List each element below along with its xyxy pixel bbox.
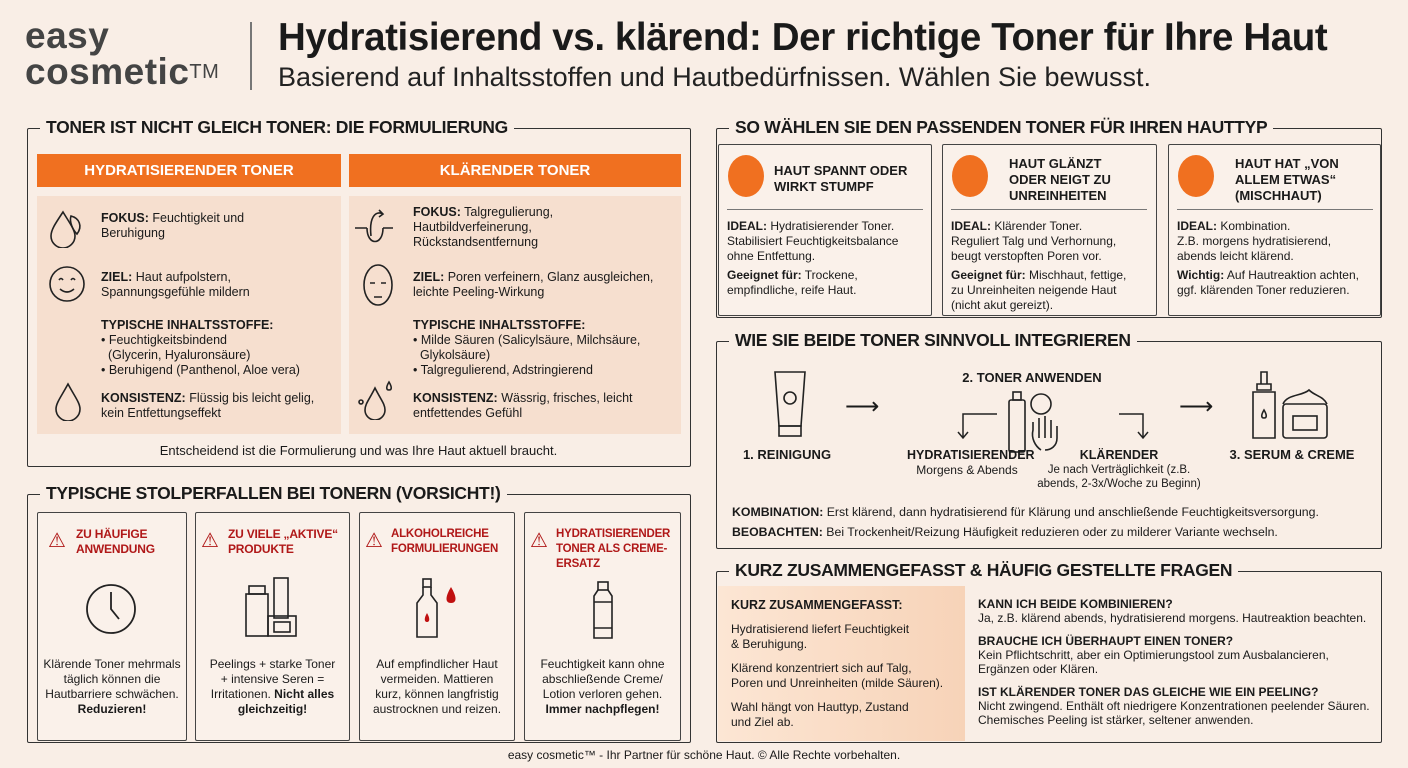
arrow: ⟶ xyxy=(845,393,879,420)
column klärend: leichte Peeling-Wirkung xyxy=(413,285,544,299)
icon: bottle xyxy=(593,581,613,639)
card: spannt: HAUT SPANNT ODER xyxy=(774,163,907,178)
faq column: Ja, z.B. klärend abends, hydratisierend morgens. Hautreaktion beachten. BRAUCHE ICH ÜBERHAUPT EINEN TONER? xyxy=(978,611,1366,648)
icon: drops xyxy=(358,380,392,420)
step 1: 1. REINIGUNG xyxy=(743,447,831,462)
card: creme-ersatz xyxy=(524,512,681,741)
card: creme-ersatz: TONER ALS CREME- xyxy=(556,543,667,555)
card: glänzt: (nicht akut gereizt). xyxy=(951,298,1053,312)
icon: orange face xyxy=(1178,155,1214,197)
column hydratisierend: KONSISTENZ: Flüssig bis leicht gelig, xyxy=(101,391,314,405)
summary column: Wahl hängt von Hauttyp, Zustand xyxy=(731,700,909,714)
card: glänzt: zu Unreinheiten neigende Haut xyxy=(951,283,1116,297)
card: glänzt: Reguliert Talg und Verhornung, xyxy=(951,234,1116,248)
card: zu viele aktive xyxy=(195,512,350,741)
card: zu viele aktive: gleichzeitig! xyxy=(238,702,307,716)
column klärend: Glykolsäure) xyxy=(420,348,490,362)
faq column: Kein Pflichtschritt, aber ein Optimierungstool zum Ausbalancieren, xyxy=(978,648,1329,662)
summary column: Poren und Unreinheiten (milde Säuren). xyxy=(731,676,943,690)
panel: faq xyxy=(716,571,1382,743)
step 2: 2. TONER ANWENDEN xyxy=(962,370,1102,385)
summary column: KURZ ZUSAMMENGEFASST: xyxy=(731,598,903,612)
icon: orange face xyxy=(728,155,764,197)
column hydratisierend: • Beruhigend (Panthenol, Aloe vera) xyxy=(101,363,300,377)
step 3 xyxy=(1230,371,1354,462)
card: glänzt: beugt verstopften Poren vor. xyxy=(951,249,1102,263)
column klärend: ZIEL: Poren verfeinern, Glanz ausgleichen, xyxy=(413,270,653,284)
card: mischhaut: (MISCHHAUT) xyxy=(1235,188,1322,203)
card: zu häufig xyxy=(37,512,187,741)
panel: formulierung xyxy=(27,128,691,467)
step 1 xyxy=(743,371,831,462)
card: creme-ersatz: abschließende Creme/ xyxy=(542,672,663,686)
card: spannt: WIRKT STUMPF xyxy=(774,179,874,194)
card: alkohol: Auf empfindlicher Haut xyxy=(376,657,498,671)
card: zu viele aktive: ZU VIELE „AKTIVE“ xyxy=(228,527,338,541)
faq column: Ergänzen oder Klären. IST KLÄRENDER TONER DAS GLEICHE WIE EIN PEELING? xyxy=(978,662,1318,699)
text: SO WÄHLEN SIE DEN PASSENDEN TONER FÜR IHREN HAUTTYP xyxy=(735,117,1267,137)
card: spannt xyxy=(718,144,932,316)
summary column: Klärend konzentriert sich auf Talg, xyxy=(731,661,912,675)
card: alkohol: ALKOHOLREICHE xyxy=(391,528,489,540)
card: alkohol: austrocknen und reizen. xyxy=(373,702,501,716)
card: zu häufig: Reduzieren! xyxy=(78,702,146,716)
card: alkohol: ⚠ xyxy=(365,530,383,552)
text: TYPISCHE STOLPERFALLEN BEI TONERN (VORSICHT!) xyxy=(46,483,500,503)
summary column xyxy=(718,586,965,741)
card: mischhaut: ggf. klärenden Toner reduzieren. xyxy=(1177,283,1350,297)
panel: stolperfallen xyxy=(27,494,691,743)
text: WIE SIE BEIDE TONER SINNVOLL INTEGRIEREN xyxy=(735,330,1131,350)
column klärend: KONSISTENZ: Wässrig, frisches, leicht xyxy=(413,391,632,405)
card: alkohol: FORMULIERUNGEN xyxy=(391,543,498,555)
card: spannt: Stabilisiert Feuchtigkeitsbalance xyxy=(727,234,898,248)
column klärend: • Talgregulierend, Adstringierend xyxy=(413,363,593,377)
card: glänzt: ODER NEIGT ZU xyxy=(1009,172,1111,187)
icon: clock xyxy=(86,584,136,634)
card: zu viele aktive: ⚠ xyxy=(201,530,219,552)
panel: hauttyp xyxy=(716,128,1382,318)
card: zu häufig: Hautbarriere schwächen. xyxy=(45,687,179,701)
card: zu viele aktive: PRODUKTE xyxy=(228,542,294,556)
faq column xyxy=(978,597,1370,727)
card: mischhaut: Wichtig: Auf Hautreaktion achten, xyxy=(1177,268,1359,282)
logo: cosmeticTM xyxy=(25,51,219,92)
summary column: und Ziel ab. xyxy=(731,715,794,729)
card: glänzt: IDEAL: Klärender Toner. xyxy=(951,219,1082,233)
footer note: Entscheidend ist die Formulierung und was Ihre Haut aktuell braucht. xyxy=(160,443,557,458)
card: glänzt: Geeignet für: Mischhaut, fettige, xyxy=(951,268,1126,282)
icon: face xyxy=(363,264,393,306)
text: KURZ ZUSAMMENGEFASST & HÄUFIG GESTELLTE FRAGEN xyxy=(735,560,1232,580)
card: mischhaut: IDEAL: Kombination. xyxy=(1177,219,1290,233)
card: spannt: IDEAL: Hydratisierender Toner. xyxy=(727,219,894,233)
card: mischhaut: abends leicht klärend. xyxy=(1177,249,1294,263)
notes: KOMBINATION: Erst klärend, dann hydratisierend für Klärung und anschließende Feuchtigkeitsversorgung. xyxy=(732,505,1319,519)
card: zu häufig: Klärende Toner mehrmals xyxy=(43,657,181,671)
step 2: Je nach Verträglichkeit (z.B. xyxy=(1048,464,1190,476)
header klärend: KLÄRENDER TONER xyxy=(440,162,590,179)
card: alkohol: kurz, können langfristig xyxy=(375,687,499,701)
faq column: Nicht zwingend. Enthält oft niedrigere Konzentrationen peelender Säuren. xyxy=(978,699,1370,713)
step 2 xyxy=(907,370,1201,490)
card: zu häufig: täglich können die xyxy=(64,672,160,686)
column klärend: FOKUS: Talgregulierung, xyxy=(413,205,553,219)
card: zu viele aktive: + intensive Seren = xyxy=(221,672,324,686)
card: mischhaut xyxy=(1168,144,1381,316)
card: glänzt: HAUT GLÄNZT xyxy=(1009,156,1101,171)
card: zu häufig: ZU HÄUFIGE xyxy=(76,527,147,541)
column klärend: entfettendes Gefühl xyxy=(413,406,522,420)
footer: easy cosmetic™ - Ihr Partner für schöne Haut. © Alle Rechte vorbehalten. xyxy=(508,748,900,762)
faq column: Chemisches Peeling ist stärker, seltener anwenden. xyxy=(978,713,1253,727)
card: creme-ersatz: Lotion verloren gehen. xyxy=(543,687,662,701)
card: mischhaut: HAUT HAT „VON xyxy=(1235,156,1339,171)
icon: drop leaf xyxy=(50,210,81,248)
notes xyxy=(732,505,1319,539)
card: creme-ersatz: ⚠ xyxy=(530,530,548,552)
step 2: KLÄRENDER xyxy=(1080,448,1158,462)
column hydratisierend: kein Entfettungseffekt xyxy=(101,406,221,420)
icon: products xyxy=(245,577,297,637)
logo xyxy=(25,15,219,92)
card: alkohol xyxy=(359,512,515,741)
header hydratisierend xyxy=(37,154,341,187)
notes: BEOBACHTEN: Bei Trockenheit/Reizung Häufigkeit reduzieren oder zu milderer Variante wechseln. xyxy=(732,525,1278,539)
column klärend: TYPISCHE INHALTSSTOFFE: xyxy=(413,318,585,332)
card: glänzt xyxy=(942,144,1157,316)
card: zu häufig: ⚠ xyxy=(48,530,66,552)
column klärend: • Milde Säuren (Salicylsäure, Milchsäure, xyxy=(413,333,640,347)
card: zu viele aktive: Irritationen. Nicht alles xyxy=(211,687,334,701)
column hydratisierend: Beruhigung xyxy=(101,226,165,240)
icon: smile face xyxy=(49,266,85,302)
card: creme-ersatz: Immer nachpflegen! xyxy=(545,702,660,716)
summary column: Hydratisierend liefert Feuchtigkeit xyxy=(731,622,909,636)
title: Hydratisierend vs. klärend: Der richtige Toner für Ihre Haut xyxy=(278,16,1327,59)
text: TONER IST NICHT GLEICH TONER: DIE FORMULIERUNG xyxy=(46,117,508,137)
card: mischhaut: ALLEM ETWAS“ xyxy=(1235,172,1336,187)
column hydratisierend: FOKUS: Feuchtigkeit und xyxy=(101,211,244,225)
column hydratisierend: TYPISCHE INHALTSSTOFFE: xyxy=(101,318,273,332)
column hydratisierend: ZIEL: Haut aufpolstern, xyxy=(101,270,231,284)
panel: integrieren xyxy=(716,341,1382,549)
card: spannt: empfindliche, reife Haut. xyxy=(727,283,856,297)
icon: pore xyxy=(355,209,393,242)
step 2: HYDRATISIERENDER xyxy=(907,448,1035,462)
card: zu viele aktive: Peelings + starke Toner xyxy=(210,657,335,671)
card: zu häufig: ANWENDUNG xyxy=(76,542,155,556)
column hydratisierend: (Glycerin, Hyaluronsäure) xyxy=(108,348,250,362)
step 3: 3. SERUM & CREME xyxy=(1230,447,1354,462)
faq column: KANN ICH BEIDE KOMBINIEREN? xyxy=(978,597,1173,611)
card: mischhaut: Z.B. morgens hydratisierend, xyxy=(1177,234,1331,248)
card: creme-ersatz: HYDRATISIERENDER xyxy=(556,528,670,540)
column hydratisierend xyxy=(37,196,341,434)
icon: orange face xyxy=(952,155,988,197)
subtitle: Basierend auf Inhaltsstoffen und Hautbedürfnissen. Wählen Sie bewusst. xyxy=(278,62,1151,92)
summary column: & Beruhigung. xyxy=(731,637,807,651)
column klärend: Rückstandsentfernung xyxy=(413,235,538,249)
logo: easy xyxy=(25,15,109,56)
column klärend: Hautbildverfeinerung, xyxy=(413,220,532,234)
card: creme-ersatz: ERSATZ xyxy=(556,558,600,570)
column klärend xyxy=(349,196,681,434)
card: spannt: Geeignet für: Trockene, xyxy=(727,268,858,282)
card: spannt: ohne Entfettung. xyxy=(727,249,815,263)
icon: drop xyxy=(55,382,81,421)
step 2: Morgens & Abends xyxy=(916,463,1018,477)
card: alkohol: vermeiden. Mattieren xyxy=(381,672,493,686)
step 2: abends, 2-3x/Woche zu Beginn) xyxy=(1037,478,1201,490)
column hydratisierend: Spannungsgefühle mildern xyxy=(101,285,250,299)
arrow: ⟶ xyxy=(1179,393,1213,420)
card: glänzt: UNREINHEITEN xyxy=(1009,188,1107,203)
icon: bottle drop xyxy=(416,578,456,638)
card: creme-ersatz: Feuchtigkeit kann ohne xyxy=(540,657,665,671)
column hydratisierend: • Feuchtigkeitsbindend xyxy=(101,333,227,347)
header hydratisierend: HYDRATISIERENDER TONER xyxy=(84,162,294,179)
header klärend xyxy=(349,154,681,187)
